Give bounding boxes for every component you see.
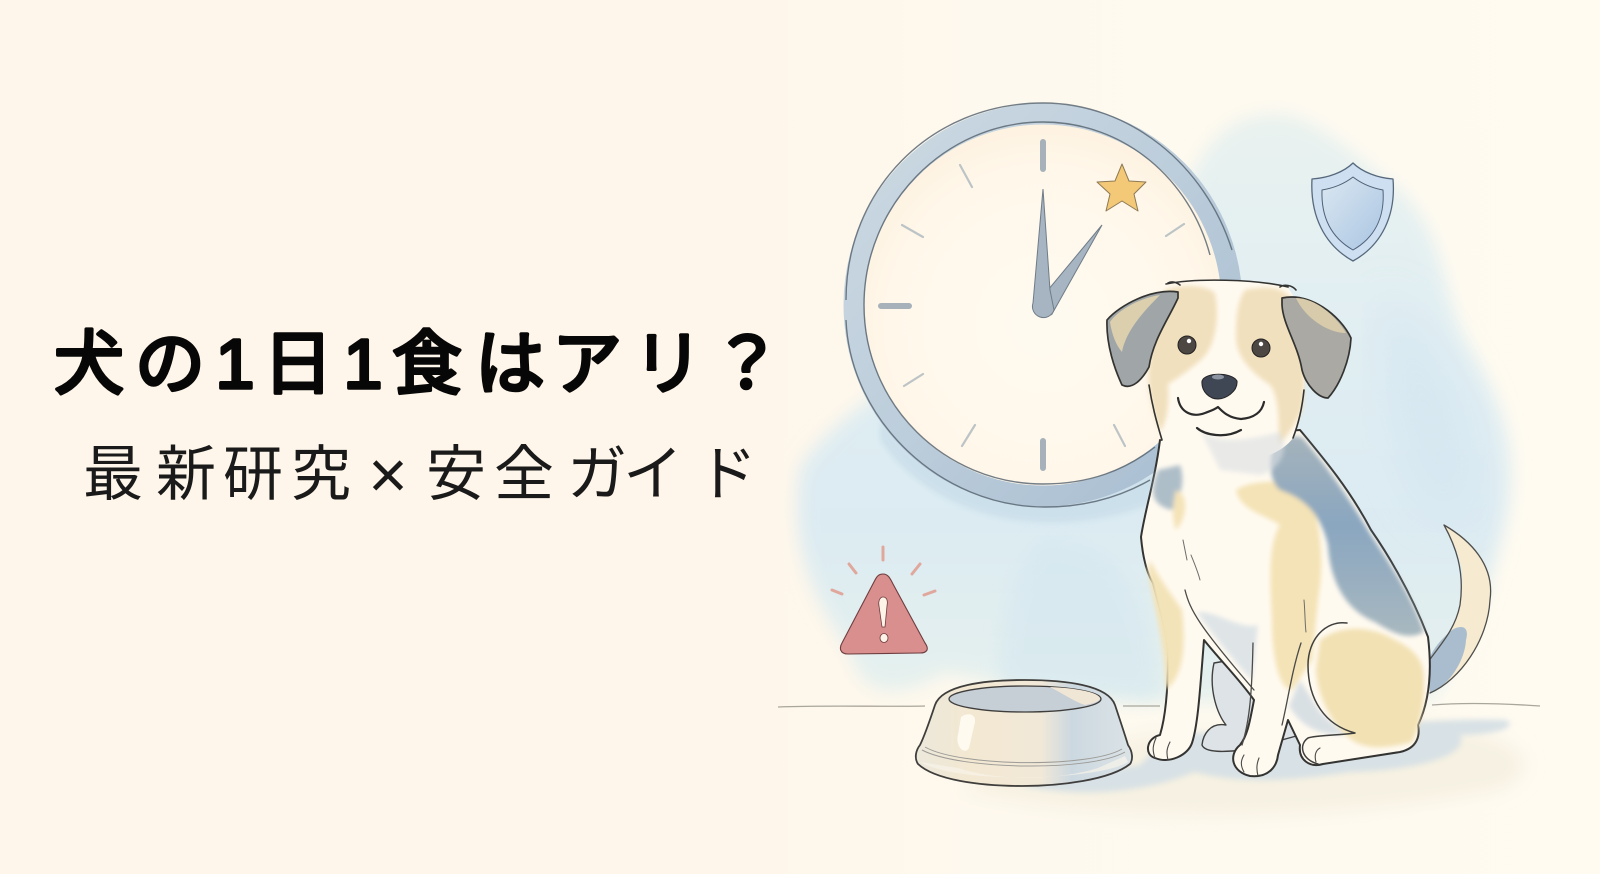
bowl inner	[949, 686, 1101, 712]
subtitle: ×	[368, 437, 408, 513]
dog	[1107, 280, 1491, 776]
mouth	[1178, 398, 1264, 435]
head outline	[1149, 280, 1304, 440]
left ear	[1107, 291, 1178, 386]
dog bowl	[916, 680, 1132, 786]
icon: warning triangle	[832, 547, 935, 654]
watercolor background wash	[797, 114, 1510, 702]
subtitle: 最新研究	[83, 441, 351, 508]
wall clock	[846, 103, 1232, 523]
paw toes	[1153, 738, 1320, 776]
clock shadow	[880, 420, 1160, 523]
bowl rim lines and highlight	[922, 747, 1125, 766]
chest fur	[1183, 540, 1306, 632]
floor horizon line	[778, 703, 1540, 707]
clock ring	[854, 114, 1232, 496]
clock hands	[1032, 189, 1102, 318]
tail	[1427, 525, 1491, 693]
back paw and belly	[1202, 650, 1300, 751]
icon: star	[1097, 164, 1146, 211]
bowl body	[916, 680, 1132, 786]
hind thigh	[1303, 623, 1355, 764]
exclamation mark	[879, 597, 888, 642]
head base	[1148, 280, 1304, 462]
warning rays	[832, 547, 935, 595]
nose	[1202, 374, 1237, 399]
body colour patches	[1148, 435, 1424, 747]
floor shadows	[960, 719, 1524, 816]
right eye	[1252, 339, 1270, 357]
left eye	[1178, 336, 1196, 354]
icon: shield	[1312, 163, 1393, 261]
clock tick marks	[881, 142, 1184, 468]
front leg inner line	[1185, 590, 1301, 745]
head	[1107, 280, 1351, 475]
body	[1141, 430, 1430, 776]
right ear	[1282, 297, 1351, 398]
title: 犬の1日1食はアリ？	[54, 325, 782, 403]
subtitle: 安全ガイド	[426, 441, 757, 508]
tan patches	[1148, 286, 1304, 475]
